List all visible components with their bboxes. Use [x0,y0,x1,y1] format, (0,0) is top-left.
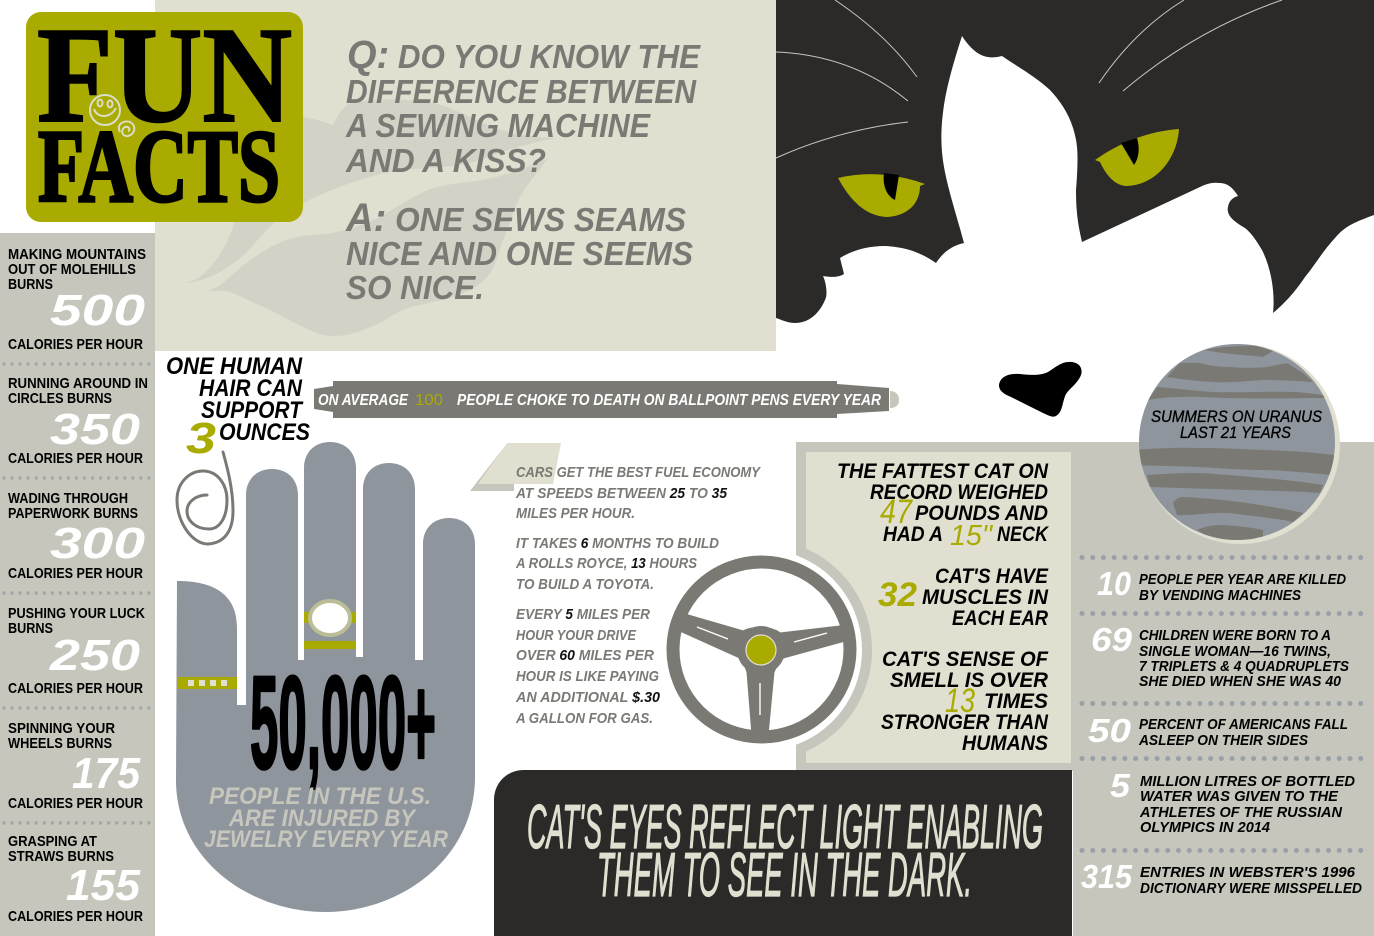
illustration: cat face [776,0,1374,417]
text: car facts: IT TAKES 6 MONTHS TO BUILD [516,535,719,552]
fact: sleep on sides: PERCENT OF AMERICANS FALL [1139,716,1348,733]
text: car facts: AT SPEEDS BETWEEN 25 TO 35 [515,485,728,502]
fact: 69 children: 69 [1091,621,1133,658]
text: car facts: HOUR IS LIKE PAYING [516,668,659,685]
fact: 69 children: SINGLE WOMAN—16 TWINS, [1139,643,1331,660]
fact: ear muscles: 32 [878,576,917,614]
fact: sense of smell [881,648,1049,755]
fact: fattest cat: THE FATTEST CAT ON [837,460,1049,483]
fact: fattest cat: POUNDS AND [915,502,1048,525]
panel: sidebar calories [0,233,155,936]
sidebar item: running [8,375,148,467]
illustration: ballpoint pen banner: PEOPLE CHOKE TO DEATH ON BALLPOINT PENS EVERY YEAR [457,392,882,409]
sidebar item: mountains: OUT OF MOLEHILLS [8,261,136,278]
text: car facts [515,464,762,727]
fact: sense of smell: CAT'S SENSE OF [882,648,1049,671]
answer text: SO NICE. [346,269,484,306]
sidebar item: mountains: MAKING MOUNTAINS [8,246,146,263]
whiskers [776,0,1282,158]
fact: sleep on sides: 50 [1088,712,1132,749]
illustration: ballpoint pen banner: 100 [415,392,443,409]
panel: riddle [155,0,776,351]
sidebar item: pushing: CALORIES PER HOUR [8,680,143,697]
fact: bottled water: MILLION LITRES OF BOTTLED [1140,773,1355,790]
icon: smiley and swirl [90,95,134,136]
sidebar item: mountains [8,246,146,353]
illustration: ballpoint pen banner [314,381,899,418]
sidebar item: spinning: CALORIES PER HOUR [8,795,143,812]
fact: bottled water [1110,767,1355,836]
fact: bottled water: OLYMPICS IN 2014 [1140,819,1271,836]
fact: bottled water: WATER WAS GIVEN TO THE [1140,788,1339,805]
panel: numbers list [1073,442,1374,936]
text: jewelry injuries [204,783,449,853]
sidebar item: grasping [8,833,143,925]
fact: bottled water: ATHLETES OF THE RUSSIAN [1139,804,1343,821]
title: Fun Facts badge [26,0,303,224]
sidebar item: spinning: WHEELS BURNS [8,735,112,752]
fact: fattest cat: HAD A [883,523,943,546]
fact: sense of smell: STRONGER THAN [881,711,1049,734]
answer text: NICE AND ONE SEEMS [346,235,693,272]
sidebar item: pushing [8,605,145,697]
answer text [345,196,693,306]
icon: right eye [1095,129,1179,186]
fact: sense of smell: 13 [945,682,975,720]
text: car facts: TO BUILD A TOYOTA. [516,576,654,593]
illustration: Uranus planet: SUMMERS ON URANUS [1151,407,1323,426]
fact: ear muscles: MUSCLES IN [922,586,1049,609]
fact: fattest cat: RECORD WEIGHED [870,481,1048,504]
sidebar item: pushing: 250 [49,631,141,680]
text: hair fact [166,353,310,463]
fact: sense of smell: HUMANS [962,732,1048,755]
question text: DIFFERENCE BETWEEN [346,73,697,110]
sidebar item: spinning [8,720,143,812]
icon: leaf background [185,99,557,336]
title: Fun Facts badge: FACTS [38,109,280,224]
fact: vending machines [1097,565,1346,604]
sidebar item: mountains: CALORIES PER HOUR [8,336,143,353]
text: hair fact: HAIR CAN [199,375,303,402]
text: car facts: A GALLON FOR GAS. [515,710,653,727]
text: car facts: EVERY 5 MILES PER [516,606,650,623]
fact: vending machines: PEOPLE PER YEAR ARE KILLED [1139,571,1346,588]
sidebar item: wading: WADING THROUGH [8,490,128,507]
fact: bottled water: 5 [1110,767,1131,804]
panel: eyes callout [494,770,1072,936]
illustration: steering wheel [673,562,850,737]
fact: sleep on sides: ASLEEP ON THEIR SIDES [1138,732,1308,749]
icon: hair strand [177,452,233,544]
text: jewelry injuries: ARE INJURED BY [228,805,417,832]
question text: AND A KISS? [345,142,546,179]
sidebar item: pushing: PUSHING YOUR LUCK [8,605,145,622]
sidebar item: wading: PAPERWORK BURNS [8,505,138,522]
icon: nose [999,362,1082,417]
fact: dictionary: ENTRIES IN WEBSTER'S 1996 [1140,864,1356,881]
text: car facts: OVER 60 MILES PER [516,647,654,664]
sidebar item: grasping: CALORIES PER HOUR [8,908,143,925]
fact: vending machines: BY VENDING MACHINES [1139,587,1301,604]
sidebar item: grasping: 155 [66,861,141,910]
sidebar item: spinning: SPINNING YOUR [8,720,115,737]
text: jewelry injuries: JEWELRY EVERY YEAR [204,826,449,853]
sidebar item: spinning: 175 [72,749,140,798]
illustration: hand [176,442,475,912]
sidebar item: wading: 300 [50,519,146,568]
text: car facts: HOUR YOUR DRIVE [516,627,637,644]
illustration: ballpoint pen banner: ON AVERAGE [318,392,409,409]
question text: A SEWING MACHINE [345,107,651,144]
ring on middle finger [304,601,356,649]
sidebar item: grasping: GRASPING AT [8,833,97,850]
sidebar item: grasping: STRAWS BURNS [8,848,114,865]
fact: sleep on sides [1088,712,1348,749]
sidebar item: running: CIRCLES BURNS [8,390,112,407]
fact: ear muscles: EACH EAR [952,607,1049,630]
fact: sense of smell: SMELL IS OVER [890,669,1049,692]
text: car facts: MILES PER HOUR. [516,505,635,522]
text: car facts: A ROLLS ROYCE, 13 HOURS [515,555,697,572]
sidebar item: wading: CALORIES PER HOUR [8,565,143,582]
fact: ear muscles [878,565,1049,630]
icon: left eye [838,173,925,217]
sidebar item: wading [8,490,146,582]
illustration: Uranus planet [1130,344,1340,545]
title: Fun Facts badge: FUN [37,0,292,151]
fact: 69 children: CHILDREN WERE BORN TO A [1139,627,1331,644]
fact: 69 children [1091,621,1349,690]
illustration: Uranus planet: LAST 21 YEARS [1180,423,1292,442]
panel: cat facts [796,442,1073,771]
fact: 69 children: 7 TRIPLETS & 4 QUADRUPLETS [1139,658,1349,675]
sidebar item: mountains: 500 [50,286,146,335]
fact: 69 children: SHE DIED WHEN SHE WAS 40 [1139,673,1342,690]
fact: vending machines: 10 [1097,565,1132,602]
sidebar item: running: 350 [50,405,141,454]
ring on thumb [177,677,237,689]
fact: ear muscles: CAT'S HAVE [935,565,1049,588]
fact: fattest cat [837,460,1050,552]
text: car facts: AN ADDITIONAL $.30 [515,689,661,706]
fact: fattest cat: 15" [950,520,994,552]
icon: corner tab [470,443,561,491]
sidebar item: mountains: BURNS [8,276,53,293]
fact: sense of smell: TIMES [984,690,1048,713]
text: hair fact: 3 [186,414,216,463]
fact: dictionary [1081,858,1362,897]
question text: Q: DO YOU KNOW THE [347,33,701,77]
sidebar item: pushing: BURNS [8,620,53,637]
sidebar item: running: RUNNING AROUND IN [8,375,148,392]
question text [345,33,701,179]
text: jewelry injuries: PEOPLE IN THE U.S. [209,783,431,810]
fact: dictionary: 315 [1081,858,1133,895]
fact: fattest cat: NECK [997,523,1050,546]
answer text: A: ONE SEWS SEAMS [345,196,686,240]
fact: fattest cat: 47 [880,493,913,531]
text: hair fact: SUPPORT [201,397,304,424]
text: hair fact: ONE HUMAN [166,353,303,380]
text: car facts: CARS GET THE BEST FUEL ECONOMY [516,464,762,481]
text: hair fact: OUNCES [219,419,310,446]
text: 50,000+ [250,649,436,796]
sidebar item: running: CALORIES PER HOUR [8,450,143,467]
